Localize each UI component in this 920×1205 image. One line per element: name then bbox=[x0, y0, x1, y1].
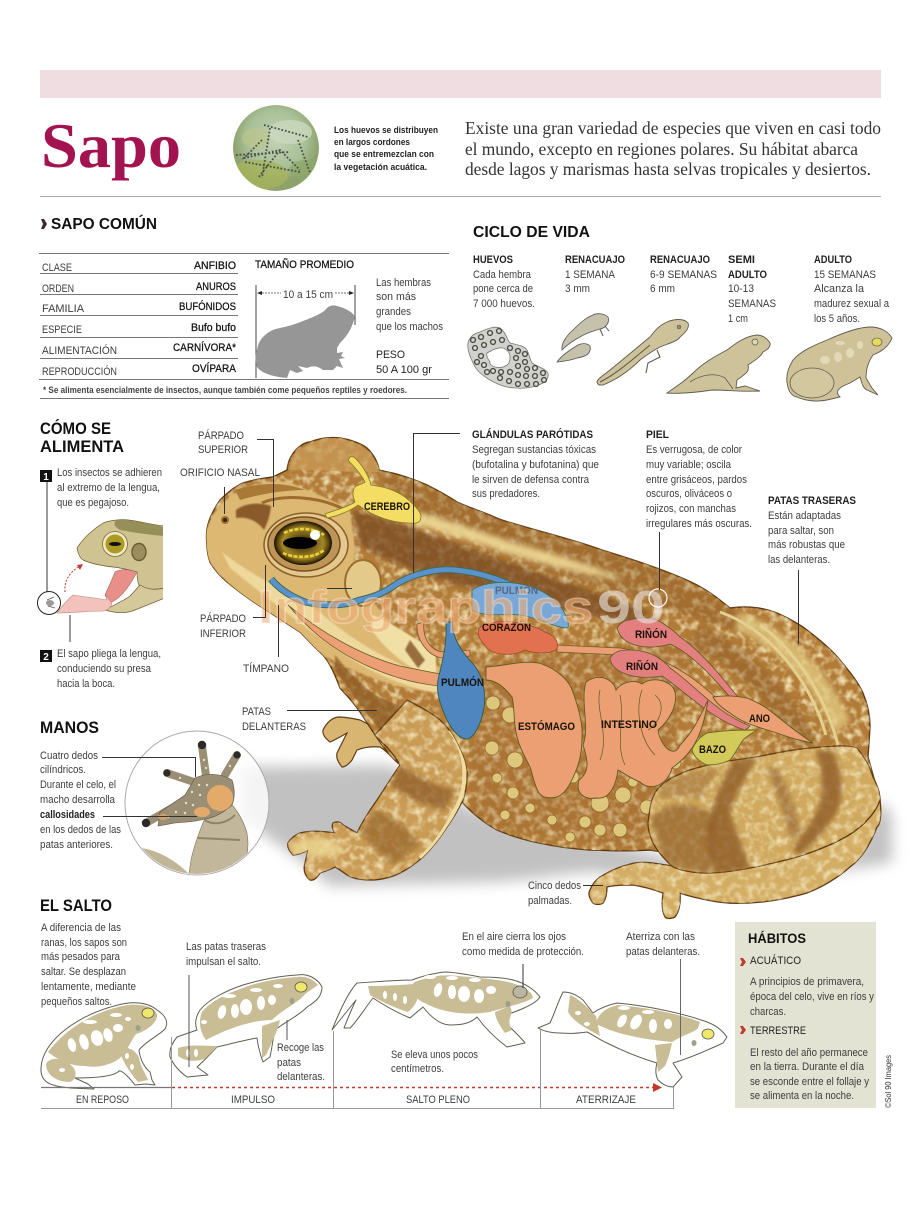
panel: taxonomy table: FAMILIA bbox=[42, 303, 85, 315]
callout: parpado inferior: PÁRPADO bbox=[200, 612, 246, 625]
panel: taxonomy table: CARNÍVORA* bbox=[173, 341, 237, 354]
frog: salto pleno bbox=[332, 972, 540, 1047]
text: manos: Durante el celo, el bbox=[40, 779, 116, 791]
panel: habitos: ACUÁTICO bbox=[750, 954, 801, 967]
skin detail ring bbox=[649, 589, 667, 607]
organ labels: RIÑÓN bbox=[635, 628, 667, 641]
panel: taxonomy table: ANUROS bbox=[196, 281, 236, 293]
step 2: 2 bbox=[43, 652, 49, 663]
callout: en el aire: En el aire cierra los ojos bbox=[462, 931, 566, 943]
panel: average size: grandes bbox=[376, 306, 411, 318]
organ labels: PULMÓN bbox=[441, 676, 484, 689]
icon: insect circle bbox=[38, 592, 60, 614]
organ labels: CORAZÓN bbox=[482, 621, 531, 634]
panel: habitos: charcas. bbox=[750, 1006, 786, 1018]
timeline: EN REPOSO bbox=[76, 1094, 129, 1106]
timeline: IMPULSO bbox=[231, 1094, 275, 1106]
text: adulto bbox=[814, 254, 889, 325]
panel: habitos bbox=[735, 922, 876, 1108]
watermark bbox=[258, 581, 665, 633]
step 2: El sapo pliega la lengua, bbox=[57, 648, 161, 660]
toad far front foot bbox=[323, 717, 398, 767]
panel: taxonomy table bbox=[39, 254, 449, 398]
intro text bbox=[465, 118, 881, 179]
text: huevos: 7 000 huevos. bbox=[473, 298, 535, 310]
toad body and head bbox=[200, 430, 890, 870]
organ: stomach bbox=[486, 662, 582, 798]
callout: aterriza bbox=[626, 931, 700, 1055]
photo caption: en largos cordones bbox=[334, 137, 410, 147]
callout: patas delanteras bbox=[242, 706, 377, 733]
panel: taxonomy table: ORDEN bbox=[42, 283, 74, 295]
frog: en reposo bbox=[41, 1003, 167, 1089]
panel: taxonomy table: ANFIBIO bbox=[194, 260, 236, 272]
text: adulto: Alcanza la bbox=[814, 283, 864, 295]
callout: parpado superior: PÁRPADO bbox=[198, 429, 244, 442]
callout: orificio nasal: ORIFICIO NASAL bbox=[180, 467, 260, 479]
panel: habitos: El resto del año permanece bbox=[750, 1047, 868, 1059]
step 2 bbox=[40, 648, 161, 690]
callout: patas traseras: PATAS TRASERAS bbox=[768, 495, 856, 507]
callout: piel: oscuros, oliváceos o bbox=[646, 488, 732, 500]
heading: como se alimenta: CÓMO SE bbox=[40, 419, 111, 438]
text: el salto intro: lentamente, mediante bbox=[41, 981, 136, 993]
text: el salto intro: saltar. Se desplazan bbox=[41, 966, 126, 978]
text: manos: patas anteriores. bbox=[40, 839, 113, 851]
organ: kidney upper bbox=[617, 618, 752, 718]
text: renacuajo 6-9 semanas: 6-9 SEMANAS bbox=[650, 269, 717, 281]
toad front leg bbox=[285, 700, 475, 890]
organ labels: BAZO bbox=[699, 744, 726, 756]
panel: average size: son más bbox=[376, 291, 416, 303]
organ: kidney lower bbox=[610, 650, 750, 730]
organ: upper lung bbox=[472, 582, 568, 628]
callout: patas traseras: más robustas que bbox=[768, 539, 845, 551]
callout: glandulas parotidas: le sirven de defensa contra bbox=[472, 474, 589, 486]
icon: toad silhouette bbox=[256, 305, 355, 378]
text: semi adulto bbox=[728, 254, 776, 325]
text: el salto intro: A diferencia de las bbox=[41, 922, 121, 934]
callout: parpado inferior: INFERIOR bbox=[200, 628, 246, 640]
heading: sapo comun: SAPO COMÚN bbox=[51, 214, 157, 233]
callout: patas delanteras: PATAS bbox=[242, 706, 271, 718]
callout: timpano: TÍMPANO bbox=[243, 662, 289, 675]
panel: average size: que los machos bbox=[376, 321, 443, 333]
text: semi adulto: SEMI bbox=[728, 254, 755, 266]
panel: habitos: en la tierra. Durante el día bbox=[750, 1061, 864, 1073]
organ: blue air tube bbox=[271, 570, 535, 605]
panel: habitos: se esconde entre el follaje y bbox=[750, 1076, 870, 1088]
arrow: tongue return bbox=[65, 564, 83, 592]
step 1 bbox=[40, 467, 162, 592]
panel: como se alimenta bbox=[38, 419, 165, 690]
text: manos bbox=[40, 750, 121, 851]
callout: se eleva: centímetros. bbox=[391, 1063, 444, 1075]
callout: piel bbox=[646, 429, 752, 590]
organ: blue air tube fill bbox=[271, 570, 535, 605]
timeline: ATERRIZAJE bbox=[576, 1094, 636, 1106]
intro text: Existe una gran variedad de especies que viven en casi todo bbox=[465, 118, 881, 138]
callout: cinco dedos: palmadas. bbox=[528, 895, 572, 907]
callout: patas traseras bbox=[768, 495, 856, 644]
text: manos: callosidades bbox=[40, 809, 95, 821]
text: renacuajo 1 semana: RENACUAJO bbox=[565, 254, 625, 266]
organ labels: INTESTINO bbox=[601, 719, 657, 731]
intro text: desde lagos y marismas hasta selvas tropicales y desiertos. bbox=[465, 159, 871, 179]
panel: el salto bbox=[40, 896, 727, 1108]
organ labels: RIÑÓN bbox=[626, 660, 658, 673]
callout: piel: irregulares más oscuras. bbox=[646, 518, 752, 530]
callout: piel: Es verrugosa, de color bbox=[646, 444, 742, 456]
callout: patas delanteras: DELANTERAS bbox=[242, 721, 306, 733]
text: renacuajo 6-9 semanas: RENACUAJO bbox=[650, 254, 710, 266]
panel: taxonomy table: ALIMENTACIÓN bbox=[42, 344, 117, 357]
callout: recoge patas: patas bbox=[277, 1057, 301, 1069]
text: semi adulto: ADULTO bbox=[728, 269, 767, 281]
heading: como se alimenta: ALIMENTA bbox=[40, 437, 124, 456]
panel: average size: 10 a 15 cm bbox=[283, 289, 333, 301]
text: adulto: 15 SEMANAS bbox=[814, 269, 876, 281]
callout: parpado inferior bbox=[200, 565, 266, 640]
heading: el salto: EL SALTO bbox=[40, 896, 112, 915]
timeline: SALTO PLENO bbox=[406, 1094, 470, 1106]
callout: aterriza: patas delanteras. bbox=[626, 946, 700, 958]
organ: anus bbox=[713, 696, 813, 743]
organ: brain bbox=[325, 457, 421, 523]
callout: recoge patas: Recoge las bbox=[277, 1042, 324, 1054]
step 1: 1 bbox=[43, 472, 49, 483]
organ labels: ESTÓMAGO bbox=[518, 720, 575, 733]
text: renacuajo 1 semana bbox=[565, 254, 625, 295]
callout: patas traseras: para saltar, son bbox=[768, 525, 834, 537]
intro text: el mundo, excepto en regiones polares. Su hábitat abarca bbox=[465, 139, 858, 159]
text: huevos: HUEVOS bbox=[473, 254, 513, 266]
text: manos: en los dedos de las bbox=[40, 824, 121, 836]
callout: aterriza: Aterriza con las bbox=[626, 931, 695, 943]
callout: se eleva: Se eleva unos pocos bbox=[391, 1049, 478, 1061]
panel: habitos: se alimenta en la noche. bbox=[750, 1090, 854, 1102]
callout: glandulas parotidas bbox=[414, 428, 599, 573]
callout: parpado superior: SUPERIOR bbox=[198, 444, 248, 456]
illustration: hand circle bbox=[102, 731, 269, 885]
callout: timpano bbox=[243, 588, 352, 675]
callout: en el aire: como medida de protección. bbox=[462, 946, 584, 958]
heading: como se alimenta bbox=[40, 419, 124, 456]
watermark: Infographics bbox=[258, 581, 593, 633]
step 2: conduciendo su presa bbox=[57, 663, 151, 675]
panel: average size: TAMAÑO PROMEDIO bbox=[255, 258, 354, 271]
photo caption: la vegetación acuática. bbox=[334, 162, 427, 172]
text: adulto: los 5 años. bbox=[814, 313, 860, 325]
timeline bbox=[41, 1030, 674, 1108]
organ labels: ANO bbox=[749, 713, 770, 725]
organ: intestine bbox=[578, 677, 708, 798]
toad hind foot bbox=[585, 795, 885, 920]
organ labels: PULMÓN bbox=[495, 584, 538, 597]
callout: en el aire bbox=[462, 931, 584, 988]
head bump bbox=[289, 438, 379, 472]
callout: impulso bbox=[186, 941, 266, 1067]
text: adulto: madurez sexual a bbox=[814, 298, 889, 310]
text: el salto intro: ranas, los sapos son bbox=[41, 937, 127, 949]
organ: heart bbox=[478, 622, 558, 654]
organ: oesophagus and tubes bbox=[288, 605, 745, 726]
photo caption bbox=[334, 125, 438, 172]
frog: aterrizaje bbox=[538, 992, 727, 1087]
toad hind thigh bbox=[645, 745, 885, 875]
text: adulto: ADULTO bbox=[814, 254, 852, 266]
callout: recoge patas: delanteras. bbox=[277, 1071, 325, 1083]
callout: glandulas parotidas: (bufotalina y bufotanina) que bbox=[472, 459, 599, 471]
callout: impulso: impulsan el salto. bbox=[186, 956, 261, 968]
text: manos: Cuatro dedos bbox=[40, 750, 98, 762]
text: huevos bbox=[473, 254, 535, 310]
heading: ciclo de vida: CICLO DE VIDA bbox=[473, 224, 590, 241]
callout: se eleva bbox=[391, 1049, 478, 1075]
callout: recoge patas bbox=[277, 1020, 325, 1083]
text: el salto intro bbox=[41, 922, 136, 1008]
panel: habitos: HÁBITOS bbox=[748, 930, 806, 946]
callout: orificio nasal bbox=[180, 467, 260, 514]
callout: parpado superior bbox=[198, 429, 274, 507]
panel: habitos: TERRESTRE bbox=[750, 1025, 806, 1037]
text: semi adulto: 10-13 bbox=[728, 283, 754, 295]
callout: patas traseras: Están adaptadas bbox=[768, 510, 841, 522]
panel: average size bbox=[255, 258, 443, 378]
panel: taxonomy table: BUFÓNIDOS bbox=[179, 300, 236, 313]
panel: taxonomy table: CLASE bbox=[42, 262, 72, 274]
callout: piel: muy variable; oscila bbox=[646, 459, 731, 471]
toad eye bbox=[264, 513, 348, 577]
step 1: que es pegajoso. bbox=[57, 497, 129, 509]
credit: ©Sol 90 Images bbox=[884, 1055, 893, 1108]
icon: semi adult bbox=[667, 335, 770, 393]
callout: cinco dedos: Cinco dedos bbox=[528, 880, 581, 892]
text: huevos: Cada hembra bbox=[473, 269, 531, 281]
callout: patas traseras: las delanteras. bbox=[768, 554, 830, 566]
text: semi adulto: 1 cm bbox=[728, 313, 748, 325]
text: manos: macho desarrolla bbox=[40, 794, 115, 806]
panel: taxonomy table: ESPECIE bbox=[42, 324, 82, 336]
text: manos: cilíndricos. bbox=[40, 764, 86, 776]
panel: average size: 50 A 100 gr bbox=[376, 364, 432, 376]
icon: eggs bbox=[468, 327, 548, 388]
text: renacuajo 1 semana: 3 mm bbox=[565, 283, 590, 295]
tympanum bbox=[345, 560, 381, 606]
callout: glandulas parotidas: Segregan sustancias tóxicas bbox=[472, 444, 596, 456]
heading: manos: MANOS bbox=[40, 718, 99, 737]
panel: taxonomy table: REPRODUCCIÓN bbox=[42, 365, 117, 378]
text: semi adulto: SEMANAS bbox=[728, 298, 776, 310]
organ: lower lung bbox=[437, 622, 485, 739]
photo caption: Los huevos se distribuyen bbox=[334, 125, 438, 135]
callout: piel: entre grisáceos, pardos bbox=[646, 474, 747, 486]
callout: impulso: Las patas traseras bbox=[186, 941, 266, 953]
hip ridges bbox=[720, 612, 838, 745]
photo caption: que se entremezclan con bbox=[334, 149, 434, 159]
head cream mask bbox=[204, 481, 440, 692]
toad ground shadow bbox=[240, 765, 892, 886]
panel: average size: Las hembras bbox=[376, 277, 431, 289]
footnote: * Se alimenta esencialmente de insectos, aunque también come pequeños reptiles y roedores. bbox=[43, 385, 407, 395]
step 2: hacia la boca. bbox=[57, 678, 115, 690]
text: el salto intro: más pesados para bbox=[41, 951, 120, 963]
illustration: feeding toad head bbox=[57, 520, 165, 613]
organ: spleen bbox=[692, 730, 757, 765]
text: el salto intro: pequeños saltos. bbox=[41, 996, 112, 1008]
photo: egg strands bbox=[228, 105, 321, 191]
panel: taxonomy table: OVÍPARA bbox=[192, 362, 237, 375]
header band bbox=[40, 70, 881, 98]
organ labels bbox=[364, 501, 770, 756]
large warts bbox=[485, 696, 681, 842]
text: huevos: pone cerca de bbox=[473, 283, 533, 295]
watermark: 90 bbox=[597, 581, 665, 633]
callout: glandulas parotidas: GLÁNDULAS PARÓTIDAS bbox=[472, 428, 593, 441]
frog: impulso bbox=[170, 975, 322, 1077]
callout: piel: rojizos, con manchas bbox=[646, 503, 736, 515]
callout: piel: PIEL bbox=[646, 429, 669, 441]
callout: cinco dedos bbox=[528, 880, 603, 907]
step 1: al extremo de la lengua, bbox=[57, 482, 160, 494]
icon: small tadpoles bbox=[557, 314, 609, 362]
icon: adult toad bbox=[787, 327, 892, 401]
icon: tadpole with legs bbox=[597, 320, 688, 385]
title: Sapo bbox=[41, 110, 181, 181]
panel: habitos: época del celo, vive en ríos y bbox=[750, 991, 875, 1003]
panel: manos bbox=[40, 718, 269, 885]
panel: taxonomy table: Bufo bufo bbox=[191, 322, 236, 334]
text: renacuajo 1 semana: 1 SEMANA bbox=[565, 269, 616, 281]
mottling bbox=[200, 430, 890, 870]
toad nostril bbox=[222, 517, 228, 523]
panel: average size: PESO bbox=[376, 349, 405, 361]
organ labels: CEREBRO bbox=[364, 501, 410, 513]
illustration: anatomical toad bbox=[200, 430, 890, 920]
step 1: Los insectos se adhieren bbox=[57, 467, 162, 479]
panel: habitos: A principios de primavera, bbox=[750, 976, 864, 988]
callout: glandulas parotidas: sus predadores. bbox=[472, 488, 540, 500]
text: renacuajo 6-9 semanas bbox=[650, 254, 717, 295]
text: renacuajo 6-9 semanas: 6 mm bbox=[650, 283, 675, 295]
